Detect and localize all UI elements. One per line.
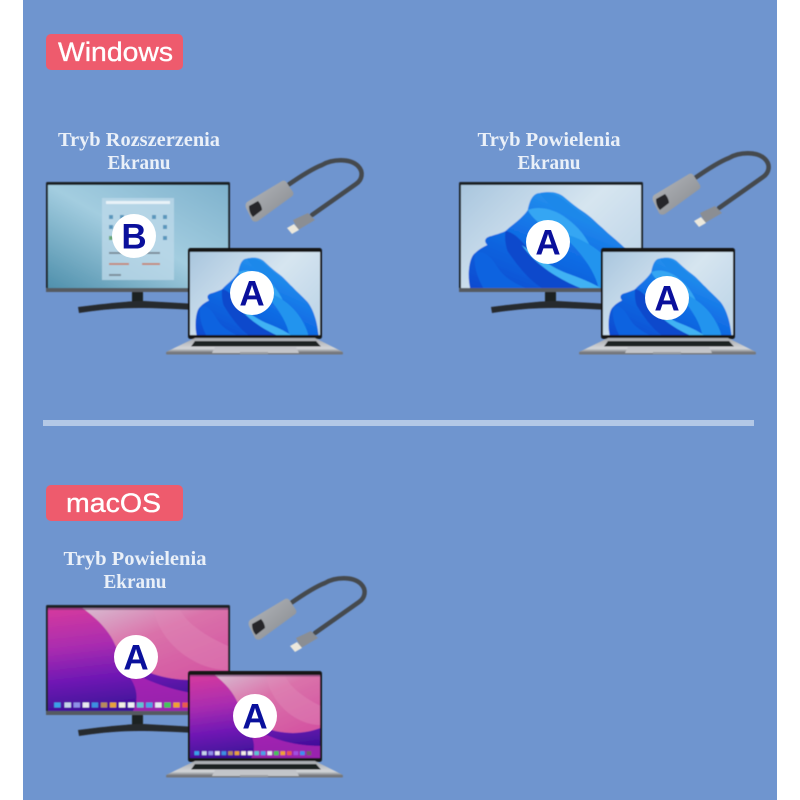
illustration: duplicated screen setup macOS: [46, 578, 365, 778]
marker A laptop: [645, 276, 689, 320]
heading: Tryb Powielenia Ekranu (macOS): Ekranu: [104, 571, 166, 593]
heading: Tryb Powielenia Ekranu (macOS): Tryb Powielenia: [64, 548, 207, 570]
illustration: extended screen setup: [46, 160, 362, 354]
marker A: [230, 271, 274, 315]
monitor: [459, 182, 643, 313]
badge: macOS: macOS: [66, 488, 161, 518]
badge: Windows: [46, 34, 183, 70]
illustration: duplicated screen setup Windows: [459, 153, 769, 354]
marker A monitor: [114, 635, 158, 679]
marker B: B: [121, 218, 147, 256]
badge: Windows: Windows: [58, 37, 173, 67]
marker A laptop: [233, 694, 277, 738]
icon: adapter: [653, 153, 769, 227]
heading: Tryb Rozszerzenia Ekranu: Tryb Rozszerzenia: [58, 129, 220, 151]
marker A: A: [239, 274, 265, 314]
divider: [43, 420, 754, 426]
monitor with start menu: [46, 182, 230, 313]
heading: Tryb Powielenia Ekranu (Windows): Ekranu: [518, 152, 580, 174]
heading: Tryb Rozszerzenia Ekranu: Ekranu: [108, 152, 170, 174]
icon: USB-C to HDMI adapter: [246, 160, 362, 234]
heading: Tryb Rozszerzenia Ekranu: [58, 129, 220, 174]
marker A monitor: A: [535, 224, 561, 262]
marker A laptop: A: [654, 280, 680, 318]
laptop: [579, 248, 756, 354]
laptop with wallpaper: [166, 248, 343, 354]
marker A monitor: A: [123, 638, 149, 678]
badge: macOS: [46, 485, 183, 521]
marker B: [112, 214, 156, 258]
heading: Tryb Powielenia Ekranu (macOS): [64, 548, 207, 593]
marker A monitor: [526, 220, 570, 264]
monitor: [46, 605, 230, 736]
marker A laptop: A: [242, 698, 268, 736]
heading: Tryb Powielenia Ekranu (Windows): [478, 129, 620, 174]
icon: adapter: [249, 578, 365, 652]
heading: Tryb Powielenia Ekranu (Windows): Tryb Powielenia: [478, 129, 620, 151]
laptop: [166, 671, 343, 778]
